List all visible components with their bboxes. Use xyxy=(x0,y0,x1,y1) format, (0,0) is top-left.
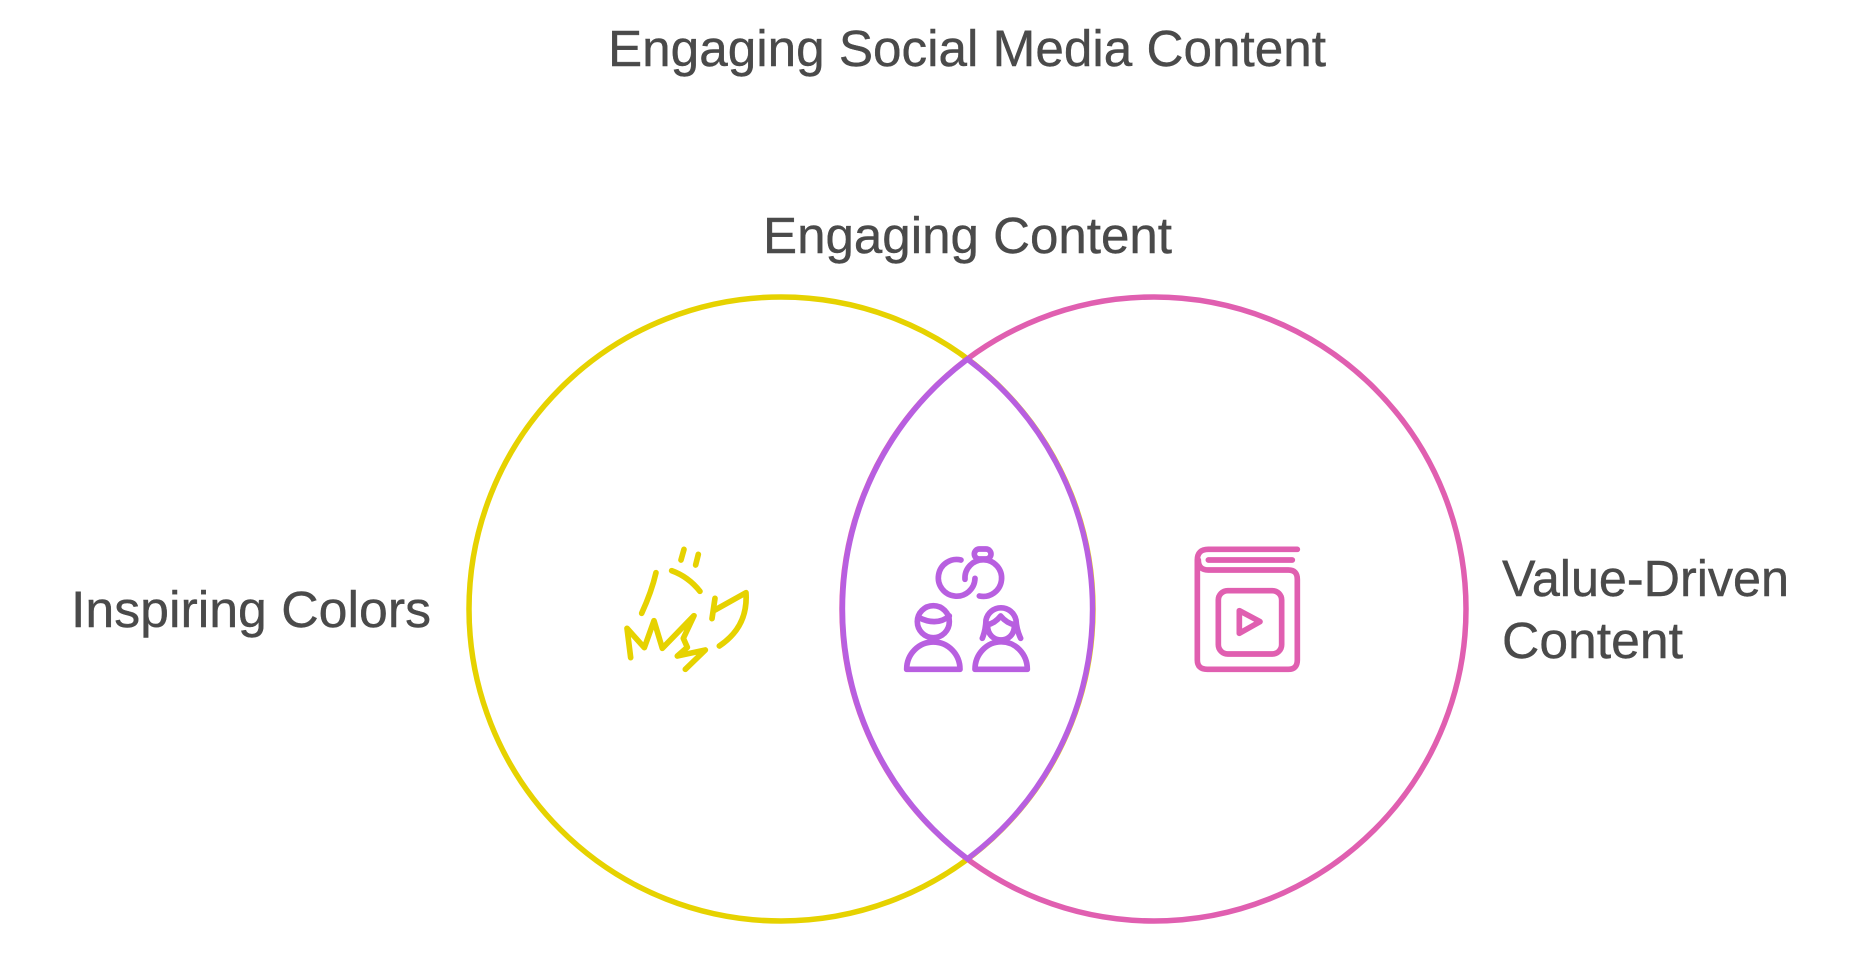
icon: purple people with linked rings xyxy=(907,549,1027,669)
title: Engaging Social Media Content xyxy=(608,20,1326,77)
circle: inspiring colors (yellow) xyxy=(469,297,1093,921)
label: inspiring colors: Inspiring Colors xyxy=(71,581,431,638)
label: value-driven content: Content xyxy=(1502,612,1683,669)
overlap: engaging content (purple lens) xyxy=(842,359,1093,859)
circle: value-driven content (pink) xyxy=(842,297,1466,921)
heading: engaging content: Engaging Content xyxy=(763,207,1172,264)
label: value-driven content xyxy=(1502,550,1789,669)
icon: yellow sparks and leaf xyxy=(627,549,746,669)
label: value-driven content: Value-Driven xyxy=(1502,550,1789,607)
icon: pink video book xyxy=(1197,549,1297,669)
